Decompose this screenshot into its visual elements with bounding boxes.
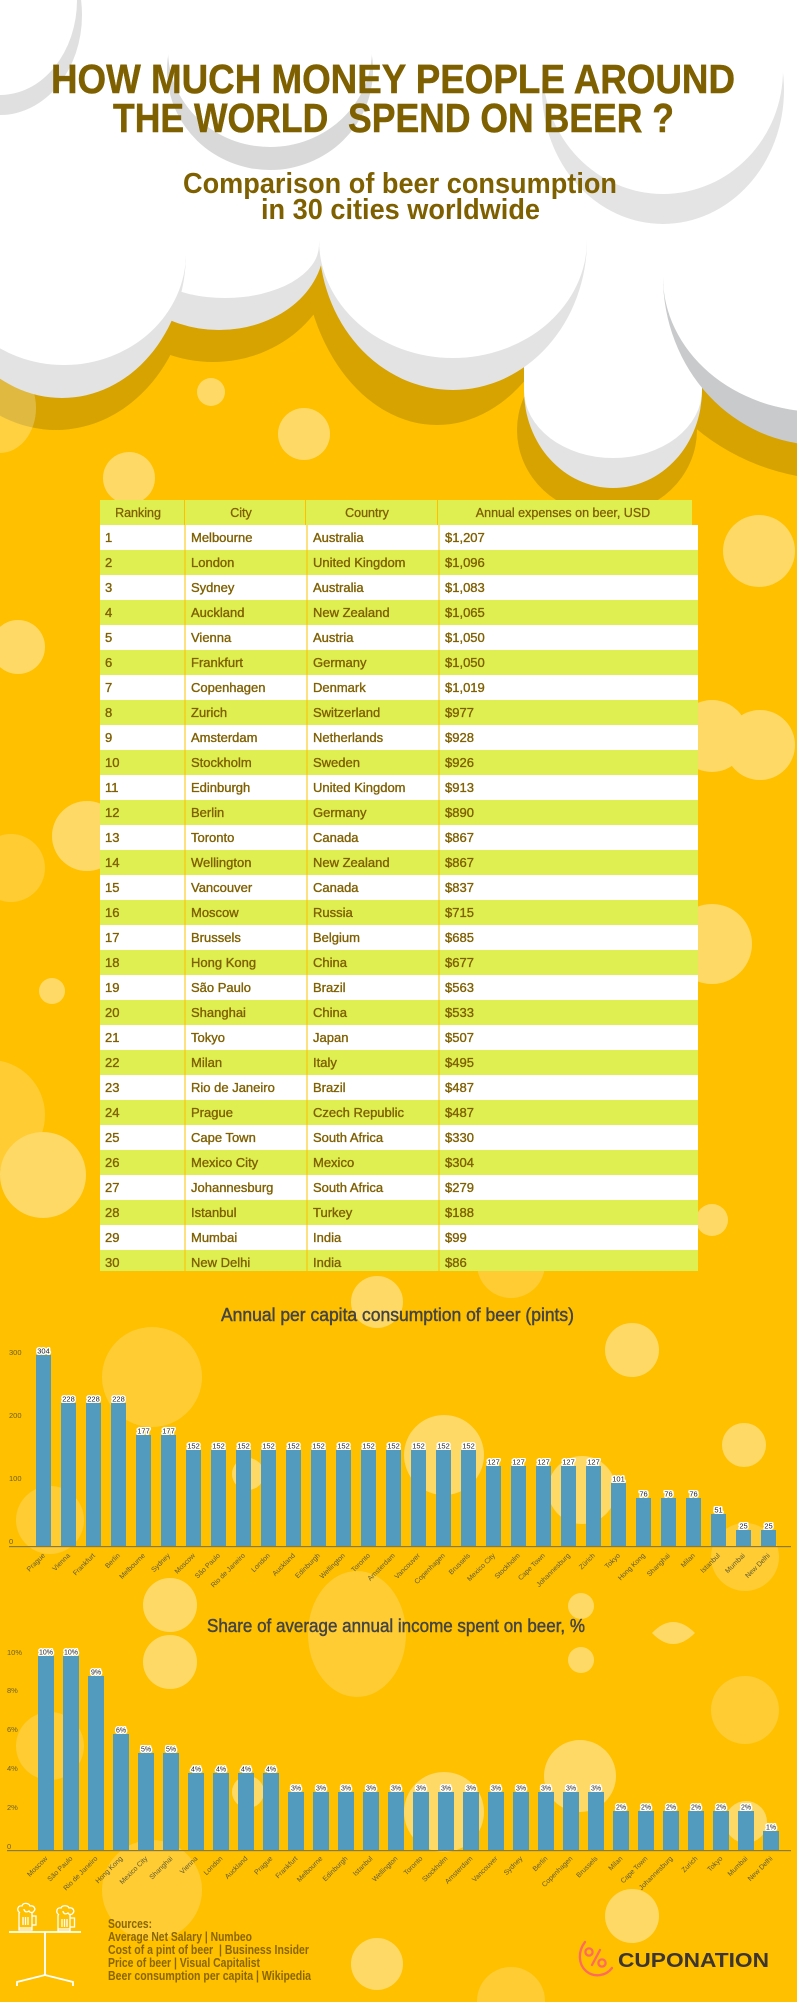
table rows text: New Delhi [191,1255,250,1270]
city labels: Amsterdam [444,1855,475,1886]
table header [100,500,692,525]
city labels: Mumbai [727,1855,750,1878]
table: annual expenses on beer [100,500,698,1271]
city labels: Amsterdam [367,1552,397,1583]
table rows text: 18 [105,955,119,970]
value labels: 152 [437,1442,450,1450]
value labels: 152 [212,1442,225,1450]
table rows text: $563 [445,980,474,995]
city labels [26,1552,772,1589]
value labels: 152 [387,1442,400,1450]
chart title: Share of average annual income spent on beer, % [207,1616,585,1636]
sources [108,1916,312,1983]
value labels: 5% [141,1746,151,1754]
table rows text: Mumbai [191,1230,237,1245]
table rows text: $1,019 [445,680,485,695]
table rows text: $507 [445,1030,474,1045]
table rows text: Australia [313,530,364,545]
icon: table with two beer mugs [9,1903,81,1986]
table rows text: $86 [445,1255,467,1270]
table rows text: $533 [445,1005,474,1020]
table rows text: $685 [445,930,474,945]
table rows text: $1,050 [445,630,485,645]
table rows text: Germany [313,805,367,820]
table rows text: 23 [105,1080,119,1095]
city labels: Auckland [272,1552,297,1578]
value labels: 3% [416,1786,426,1792]
value labels: 101 [612,1474,625,1484]
value labels: 152 [337,1442,350,1450]
table rows text: India [313,1230,342,1245]
table rows text: Czech Republic [313,1105,405,1120]
value labels: 5% [166,1746,176,1754]
value labels: 4% [266,1766,276,1774]
city labels: Cape Town [620,1855,649,1885]
table rows text: South Africa [313,1180,384,1195]
icon: table [9,1932,81,1986]
value labels: 10% [39,1650,53,1656]
table rows text: Switzerland [313,705,380,720]
city labels: Sydney [150,1552,172,1574]
icon: right mug [57,1906,74,1931]
city labels: Stockholm [421,1855,450,1884]
table rows text: $279 [445,1180,474,1195]
table rows text: 21 [105,1030,119,1045]
table rows text: $715 [445,905,474,920]
table rows text: Russia [313,905,354,920]
value labels: 127 [587,1458,600,1466]
city labels: Johannesburg [638,1855,674,1892]
table rows text: 22 [105,1055,119,1070]
city labels: New Delhi [744,1552,772,1580]
beer foam [0,0,797,488]
table rows text: 9 [105,730,112,745]
city labels: Toronto [403,1855,424,1877]
table rows text: Berlin [191,805,224,820]
table rows text: New Zealand [313,605,390,620]
y axis labels: 0 [7,1842,11,1851]
city labels: Mumbai [724,1552,747,1575]
y axis labels: 4% [7,1764,18,1773]
value labels [37,1346,773,1530]
value labels: 3% [591,1786,601,1792]
city labels: Wellington [371,1855,399,1883]
city labels: Vancouver [471,1855,500,1884]
table rows text: $977 [445,705,474,720]
table rows text: 26 [105,1155,119,1170]
y axis labels: 300 [9,1348,22,1357]
city labels: London [250,1552,272,1574]
table rows text: $1,083 [445,580,485,595]
table rows text: 15 [105,880,119,895]
value labels: 152 [312,1442,325,1450]
value labels [39,1650,776,1832]
table rows text: New Zealand [313,855,390,870]
table header: City [230,506,253,520]
city labels: Moscow [26,1855,50,1879]
sources: Price of beer | Visual Capitalist [108,1955,261,1970]
table rows text: Germany [313,655,367,670]
city labels: Istanbul [700,1552,722,1575]
table rows text: Toronto [191,830,234,845]
title: HOW MUCH MONEY PEOPLE AROUND [51,56,735,102]
table rows text: São Paulo [191,980,251,995]
logo: Cuponation: CUPONATION [618,1950,769,1972]
city labels: Wellington [319,1552,347,1580]
table rows text: $867 [445,855,474,870]
table rows text: Amsterdam [191,730,257,745]
table rows text: 28 [105,1205,119,1220]
city labels: Berlin [104,1552,122,1570]
value labels: 4% [191,1766,201,1774]
table rows text: 25 [105,1130,119,1145]
table rows text: South Africa [313,1130,384,1145]
table row stripes [100,525,698,1271]
table rows text: Auckland [191,605,244,620]
bars [36,1355,776,1546]
value labels: 51 [714,1506,723,1514]
table rows text: 11 [105,780,118,795]
table rows text: 13 [105,830,119,845]
table rows text: Frankfurt [191,655,243,670]
table rows text: Melbourne [191,530,252,545]
value labels: 3% [291,1786,301,1792]
sources: Average Net Salary | Numbeo [108,1929,252,1944]
city labels: Copenhagen [541,1855,574,1889]
sources: Beer consumption per capita | Wikipedia [108,1968,312,1983]
icon: percent smile [580,1942,612,1975]
bar chart: annual per capita consumption of beer [9,1305,791,1589]
y axis labels: 200 [9,1411,22,1420]
table header: Annual expenses on beer, USD [476,506,650,520]
table rows text: Copenhagen [191,680,265,695]
city labels: Vienna [179,1855,199,1876]
city labels: Zurich [681,1855,699,1874]
value labels: 4% [216,1766,226,1774]
value labels: 2% [666,1804,676,1812]
table rows text: Italy [313,1055,337,1070]
table rows text: Canada [313,880,359,895]
y axis labels: 6% [7,1725,18,1734]
table rows text: Belgium [313,930,360,945]
table rows text: Mexico City [191,1155,259,1170]
city labels: Auckland [224,1855,249,1881]
city labels: Hong Kong [617,1552,647,1582]
city labels: Edinburgh [294,1552,322,1580]
table rows text: 16 [105,905,119,920]
table rows text: $330 [445,1130,474,1145]
table rows text: Turkey [313,1205,353,1220]
value labels: 3% [566,1786,576,1792]
table rows text: $867 [445,830,474,845]
table rows text: $928 [445,730,474,745]
table rows text: $1,207 [445,530,485,545]
table rows text: 10 [105,755,119,770]
value labels: 3% [341,1786,351,1792]
value labels: 3% [391,1786,401,1792]
table rows text: $487 [445,1080,474,1095]
table rows text: United Kingdom [313,780,406,795]
value labels: 3% [441,1786,451,1792]
value labels: 2% [741,1804,751,1812]
table rows text: 20 [105,1005,119,1020]
city labels: Melbourne [119,1552,147,1581]
table rows text: 12 [105,805,119,820]
chart title: Annual per capita consumption of beer (pints) [221,1305,574,1325]
table rows text: 2 [105,555,112,570]
value labels: 76 [664,1490,673,1498]
city labels: Milan [608,1855,624,1872]
table rows text: Vancouver [191,880,253,895]
city labels: Shanghai [149,1855,175,1881]
value labels: 3% [541,1786,551,1792]
value labels: 10% [64,1650,78,1656]
table rows text: Brazil [313,1080,346,1095]
table rows text: 17 [105,930,119,945]
subtitle: in 30 cities worldwide [261,194,540,226]
city labels: Toronto [350,1552,372,1574]
value labels: 76 [689,1490,698,1498]
city labels: Frankfurt [72,1552,97,1577]
foam shadow on beer [0,55,797,515]
table rows text: Shanghai [191,1005,246,1020]
value labels: 2% [716,1804,726,1812]
table rows text: China [313,1005,348,1020]
table rows text: Mexico [313,1155,354,1170]
y axis labels [9,1348,22,1546]
value labels: 127 [512,1458,525,1466]
table rows text [105,530,485,1270]
table rows text: $890 [445,805,474,820]
value labels: 2% [616,1804,626,1812]
table header: Country [345,506,390,520]
table rows text: Australia [313,580,364,595]
city labels [26,1855,775,1892]
city labels: Tokyo [707,1855,724,1873]
value labels: 25 [764,1522,773,1530]
city labels: Vienna [52,1552,72,1573]
table rows text: Netherlands [313,730,384,745]
table rows text: Cape Town [191,1130,256,1145]
value labels: 177 [162,1426,175,1436]
table rows text: Tokyo [191,1030,225,1045]
city labels: Sydney [503,1855,525,1877]
table rows text: $837 [445,880,474,895]
y axis labels: 8% [7,1686,18,1695]
table rows text: Zurich [191,705,227,720]
city labels: Rio de Janeiro [210,1552,247,1589]
value labels: 228 [87,1394,100,1404]
value labels: 3% [366,1786,376,1792]
city labels: Rio de Janeiro [63,1855,99,1892]
table rows text: Prague [191,1105,233,1120]
table rows text: Johannesburg [191,1180,273,1195]
city labels: Prague [253,1855,274,1876]
title [51,56,735,141]
bar chart: share of average annual income spent on beer [7,1616,791,1892]
value labels: 6% [116,1728,126,1734]
table rows text: Canada [313,830,359,845]
bars [38,1656,779,1850]
y axis labels: 2% [7,1803,18,1812]
city labels: Tokyo [604,1552,622,1570]
value labels: 152 [237,1442,250,1450]
table rows text: 3 [105,580,112,595]
table rows text: $188 [445,1205,474,1220]
table rows text: Hong Kong [191,955,256,970]
value labels: 152 [412,1442,425,1450]
value labels: 152 [462,1442,475,1450]
city labels: Johannesburg [536,1552,572,1589]
sources: Sources: [108,1916,152,1931]
value labels: 1% [766,1824,776,1832]
value labels: 76 [639,1490,648,1498]
city labels: Zürich [578,1552,597,1571]
value labels: 228 [112,1394,125,1404]
table rows text: 5 [105,630,112,645]
city labels: London [203,1855,224,1877]
table rows text: 4 [105,605,112,620]
table rows text: Moscow [191,905,239,920]
city labels: Vancouver [394,1552,422,1581]
table rows text: Stockholm [191,755,252,770]
table rows text: London [191,555,234,570]
value labels: 3% [516,1786,526,1792]
value labels: 152 [262,1442,275,1450]
table rows text: Wellington [191,855,251,870]
table rows text: Istanbul [191,1205,237,1220]
table rows text: $677 [445,955,474,970]
city labels: São Paulo [194,1552,222,1580]
city labels: Melbourne [296,1855,324,1884]
y axis labels: 10% [7,1648,22,1657]
city labels: Brussels [448,1552,472,1576]
value labels: 304 [37,1346,50,1356]
table rows text: $913 [445,780,474,795]
city labels: Istanbul [352,1855,375,1878]
value labels: 4% [241,1766,251,1774]
value labels: 3% [491,1786,501,1792]
table rows text: $926 [445,755,474,770]
value labels: 9% [91,1670,101,1676]
city labels: Prague [26,1552,47,1573]
y axis labels [7,1648,22,1851]
table rows text: 14 [105,855,119,870]
table rows text: $1,050 [445,655,485,670]
value labels: 127 [537,1458,550,1466]
table rows text: Vienna [191,630,232,645]
value labels: 2% [691,1804,701,1812]
table rows text: 24 [105,1105,119,1120]
city labels: Stockholm [494,1552,522,1581]
table rows text: Milan [191,1055,222,1070]
value labels: 152 [187,1442,200,1450]
table rows text: 1 [105,530,112,545]
table rows text: $99 [445,1230,467,1245]
city labels: Shanghai [646,1552,672,1578]
city labels: Mexico City [466,1552,497,1583]
table rows text: 19 [105,980,119,995]
value labels: 177 [137,1426,150,1436]
title: THE WORLD SPEND ON BEER ? [113,95,674,141]
table rows text: $495 [445,1055,474,1070]
value labels: 228 [62,1394,75,1404]
table rows text: 30 [105,1255,119,1270]
sources: Cost of a pint of beer | Business Insider [108,1942,309,1957]
subtitle: Comparison of beer consumption [183,168,617,200]
city labels: Brussels [575,1855,600,1879]
table rows text: 8 [105,705,112,720]
value labels: 127 [487,1458,500,1466]
table rows text: United Kingdom [313,555,406,570]
table rows text: Rio de Janeiro [191,1080,275,1095]
city labels: Frankfurt [275,1855,299,1880]
logo: Cuponation [580,1942,769,1975]
table rows text: China [313,955,348,970]
table rows text: Brussels [191,930,241,945]
table rows text: Brazil [313,980,346,995]
table rows text: Edinburgh [191,780,250,795]
table rows text: Sydney [191,580,235,595]
value labels: 152 [362,1442,375,1450]
value labels: 3% [316,1786,326,1792]
table rows text: $1,096 [445,555,485,570]
city labels: Moscow [174,1552,198,1576]
table rows text: $487 [445,1105,474,1120]
city labels: Cape Town [517,1552,547,1582]
value labels: 127 [562,1458,575,1466]
table rows text: Sweden [313,755,360,770]
value labels: 152 [287,1442,300,1450]
city labels: Mexico City [119,1855,150,1886]
city labels: São Paulo [47,1855,74,1883]
table rows text: 6 [105,655,112,670]
city labels: Berlin [532,1855,549,1873]
table rows text: $1,065 [445,605,485,620]
city labels: New Delhi [747,1855,775,1883]
value labels: 25 [739,1522,748,1530]
y axis labels: 0 [9,1537,13,1546]
table rows text: $304 [445,1155,474,1170]
value labels: 3% [466,1786,476,1792]
table rows text: 7 [105,680,112,695]
table rows text: Austria [313,630,354,645]
table rows text: 29 [105,1230,119,1245]
table rows text: India [313,1255,342,1270]
city labels: Milan [680,1552,697,1569]
y axis labels: 100 [9,1474,22,1483]
table rows text: Denmark [313,680,366,695]
value labels: 2% [641,1804,651,1812]
table rows text: 27 [105,1180,119,1195]
table rows text: Japan [313,1030,348,1045]
icon: left mug [18,1903,36,1930]
city labels: Edinburgh [322,1855,349,1883]
city labels: Copenhagen [414,1552,447,1586]
table header: Ranking [115,506,161,520]
city labels: Hong Kong [95,1855,124,1885]
subtitle [183,168,617,226]
